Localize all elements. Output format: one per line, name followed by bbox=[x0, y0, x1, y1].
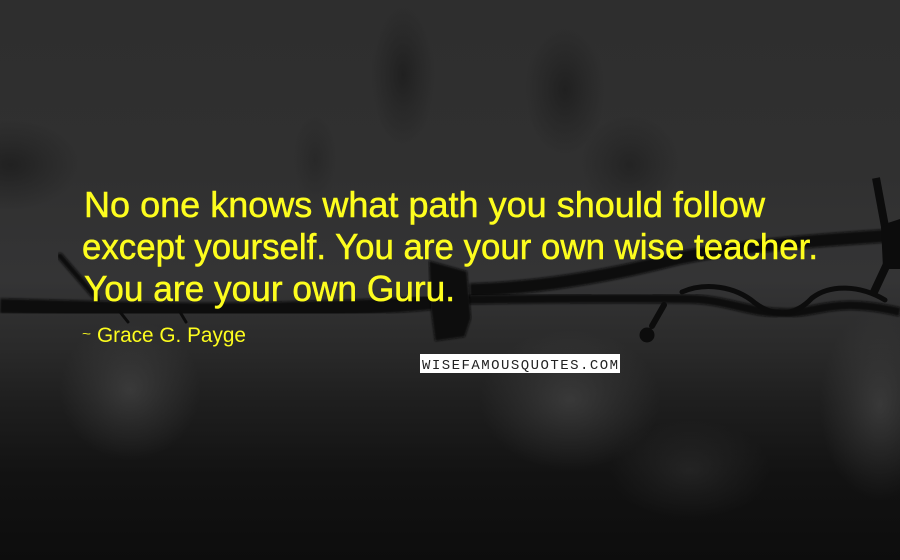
author attribution: Grace G. Payge bbox=[97, 324, 246, 347]
quote line 3: You are your own Guru. bbox=[84, 268, 455, 309]
hanging barb end bbox=[652, 305, 664, 326]
left wire, thick and out of focus bbox=[0, 300, 450, 310]
watermark: wisefamousquotes.com: WISEFAMOUSQUOTES.COM bbox=[422, 358, 618, 374]
vertical barb, right upper bbox=[876, 178, 886, 232]
barbed wire bbox=[0, 178, 900, 342]
quote line 1: No one knows what path you should follow bbox=[84, 184, 766, 225]
twisted strand bbox=[682, 287, 885, 313]
barb coil, right edge bbox=[882, 220, 900, 268]
quote line 2: except yourself. You are your own wise teacher. bbox=[82, 226, 818, 267]
vertical barb, right lower bbox=[874, 262, 888, 292]
quote text bbox=[82, 184, 818, 309]
upper wire rising to the right bbox=[470, 235, 900, 290]
author attribution: ~ bbox=[82, 326, 91, 341]
central barb knot bbox=[430, 262, 470, 340]
left barb bbox=[60, 256, 98, 300]
main lower wire bbox=[450, 299, 900, 313]
